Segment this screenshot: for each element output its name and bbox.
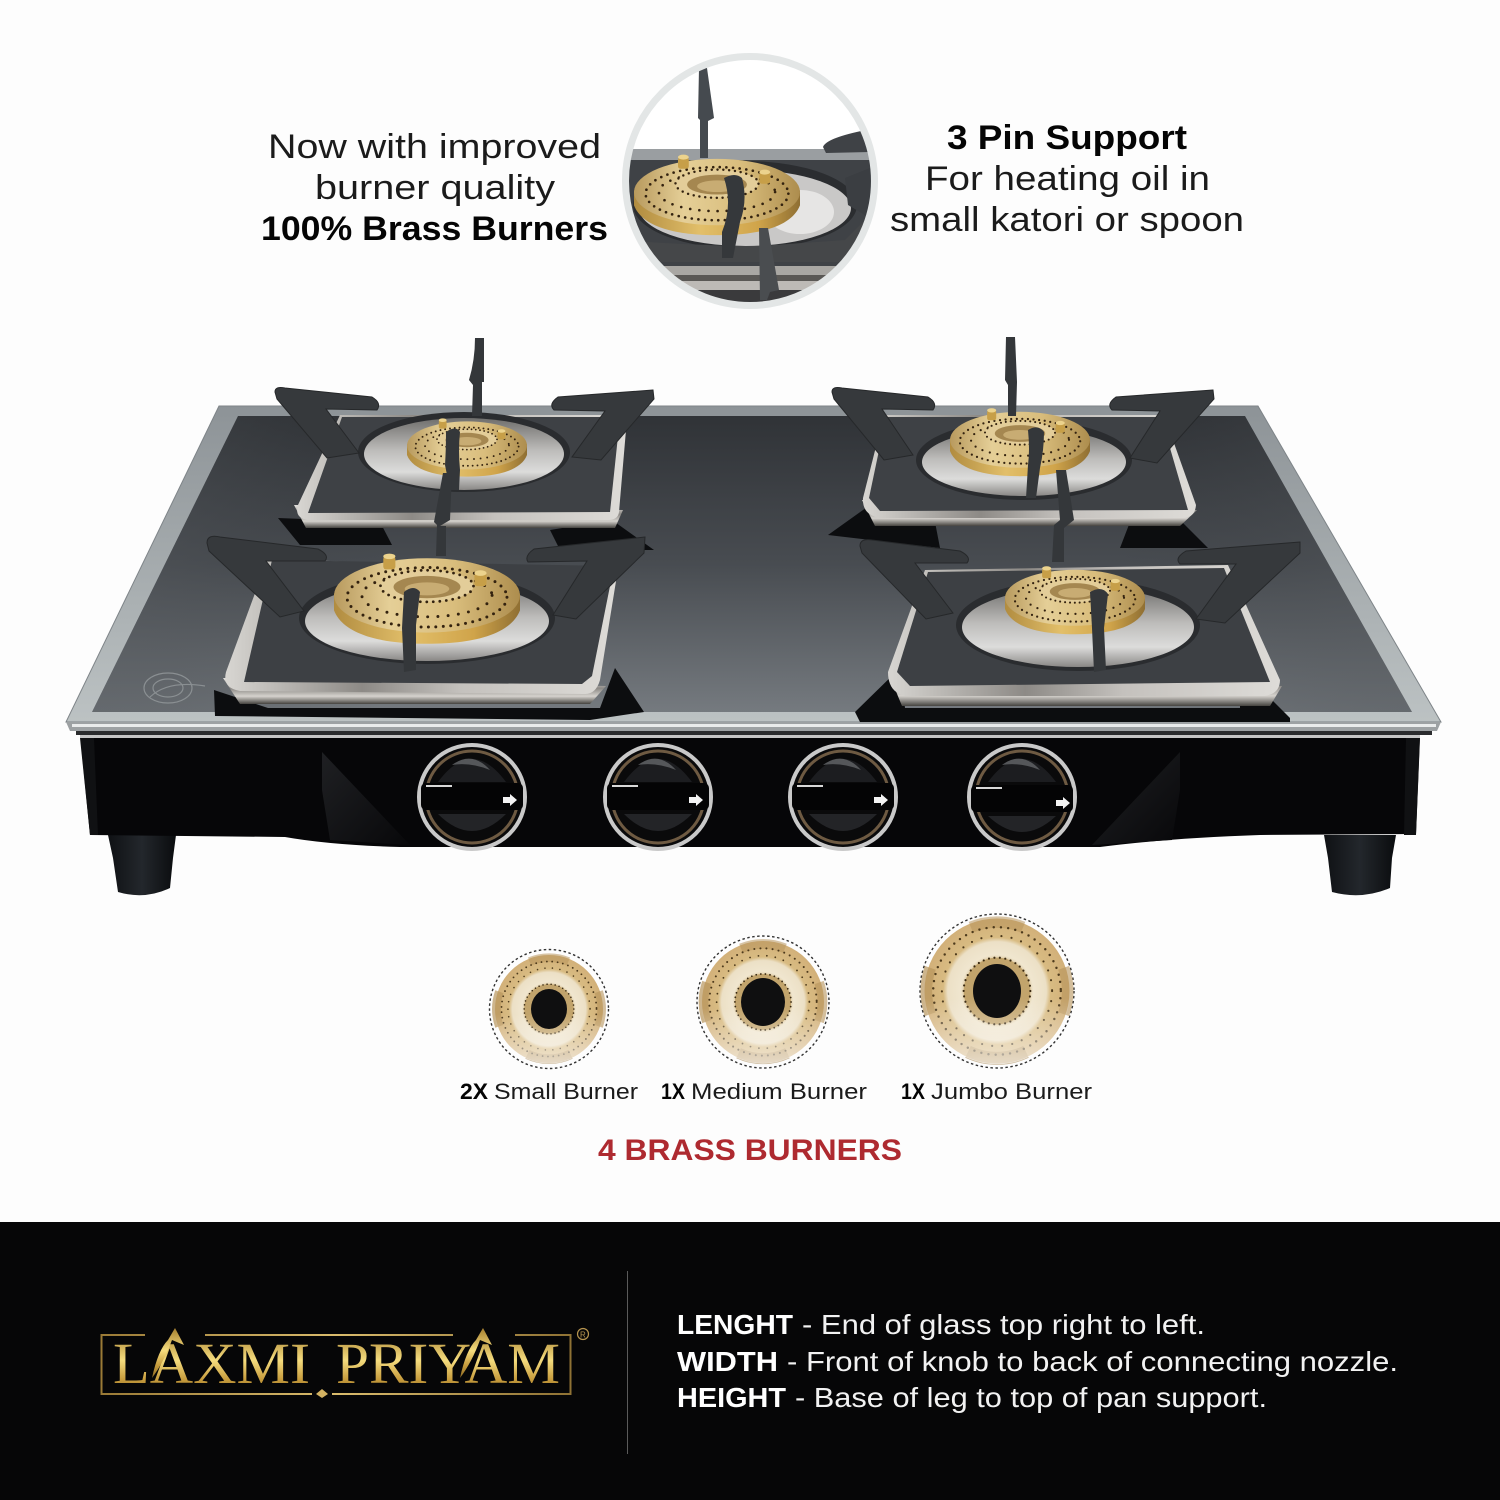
dimensions text block: - Front of knob to back of connecting nozzle. (787, 1346, 1398, 1377)
text block: 3 pin support: 3 Pin Support (947, 119, 1187, 157)
heading: 4 brass burners: 4 BRASS BURNERS (598, 1134, 902, 1167)
burner label: small: Small Burner (494, 1079, 638, 1104)
brand logo: LAXMI (113, 1331, 310, 1396)
knob 1 (419, 745, 525, 849)
dimensions text block: WIDTH (677, 1346, 778, 1377)
burner label: medium: Medium Burner (691, 1079, 867, 1104)
burner icon: jumbo (920, 914, 1074, 1068)
dimensions text block: - End of glass top right to left. (802, 1309, 1205, 1340)
inset circle: 3 pin support close-up (620, 54, 880, 310)
logo emblem on glass (144, 673, 205, 703)
burner label: jumbo: 1X (901, 1079, 925, 1104)
dimensions text block: HEIGHT (677, 1382, 786, 1413)
stove feet (108, 835, 1396, 895)
knob 4 (969, 745, 1075, 849)
knob 3 (790, 745, 896, 849)
control knobs (419, 745, 1075, 849)
burner icon: small (490, 950, 608, 1068)
brand logo: R (580, 1330, 586, 1340)
text block: 3 pin support: For heating oil in (925, 160, 1210, 198)
stove illustration (66, 337, 1441, 895)
burner unit: back left (275, 338, 654, 550)
glass top (66, 406, 1441, 738)
footer band (0, 1222, 1500, 1500)
divider (627, 1271, 628, 1454)
burner unit: back right (828, 337, 1214, 562)
burner label: jumbo: Jumbo Burner (931, 1079, 1092, 1104)
text block: improved burner quality: burner quality (315, 169, 555, 207)
text block: improved burner quality (261, 128, 608, 248)
dimensions text block: LENGHT (677, 1309, 793, 1340)
text block: improved burner quality: 100% Brass Burners (261, 210, 608, 248)
brand logo (102, 1328, 588, 1399)
burner label: small: 2X (460, 1079, 488, 1104)
text block: 3 pin support: small katori or spoon (890, 201, 1244, 239)
burner label: medium: 1X (661, 1079, 685, 1104)
burner icon: medium (697, 936, 829, 1068)
text block: 3 pin support (890, 119, 1244, 239)
burner unit: front left (207, 473, 645, 720)
knob 2 (605, 745, 711, 849)
brand logo: PRIYAM (336, 1331, 560, 1396)
stove black body (80, 734, 1420, 847)
dimensions text block: - Base of leg to top of pan support. (795, 1382, 1267, 1413)
burner unit: front right (855, 540, 1300, 722)
text block: improved burner quality: Now with improved (268, 128, 601, 166)
dimensions text block (677, 1309, 1398, 1413)
